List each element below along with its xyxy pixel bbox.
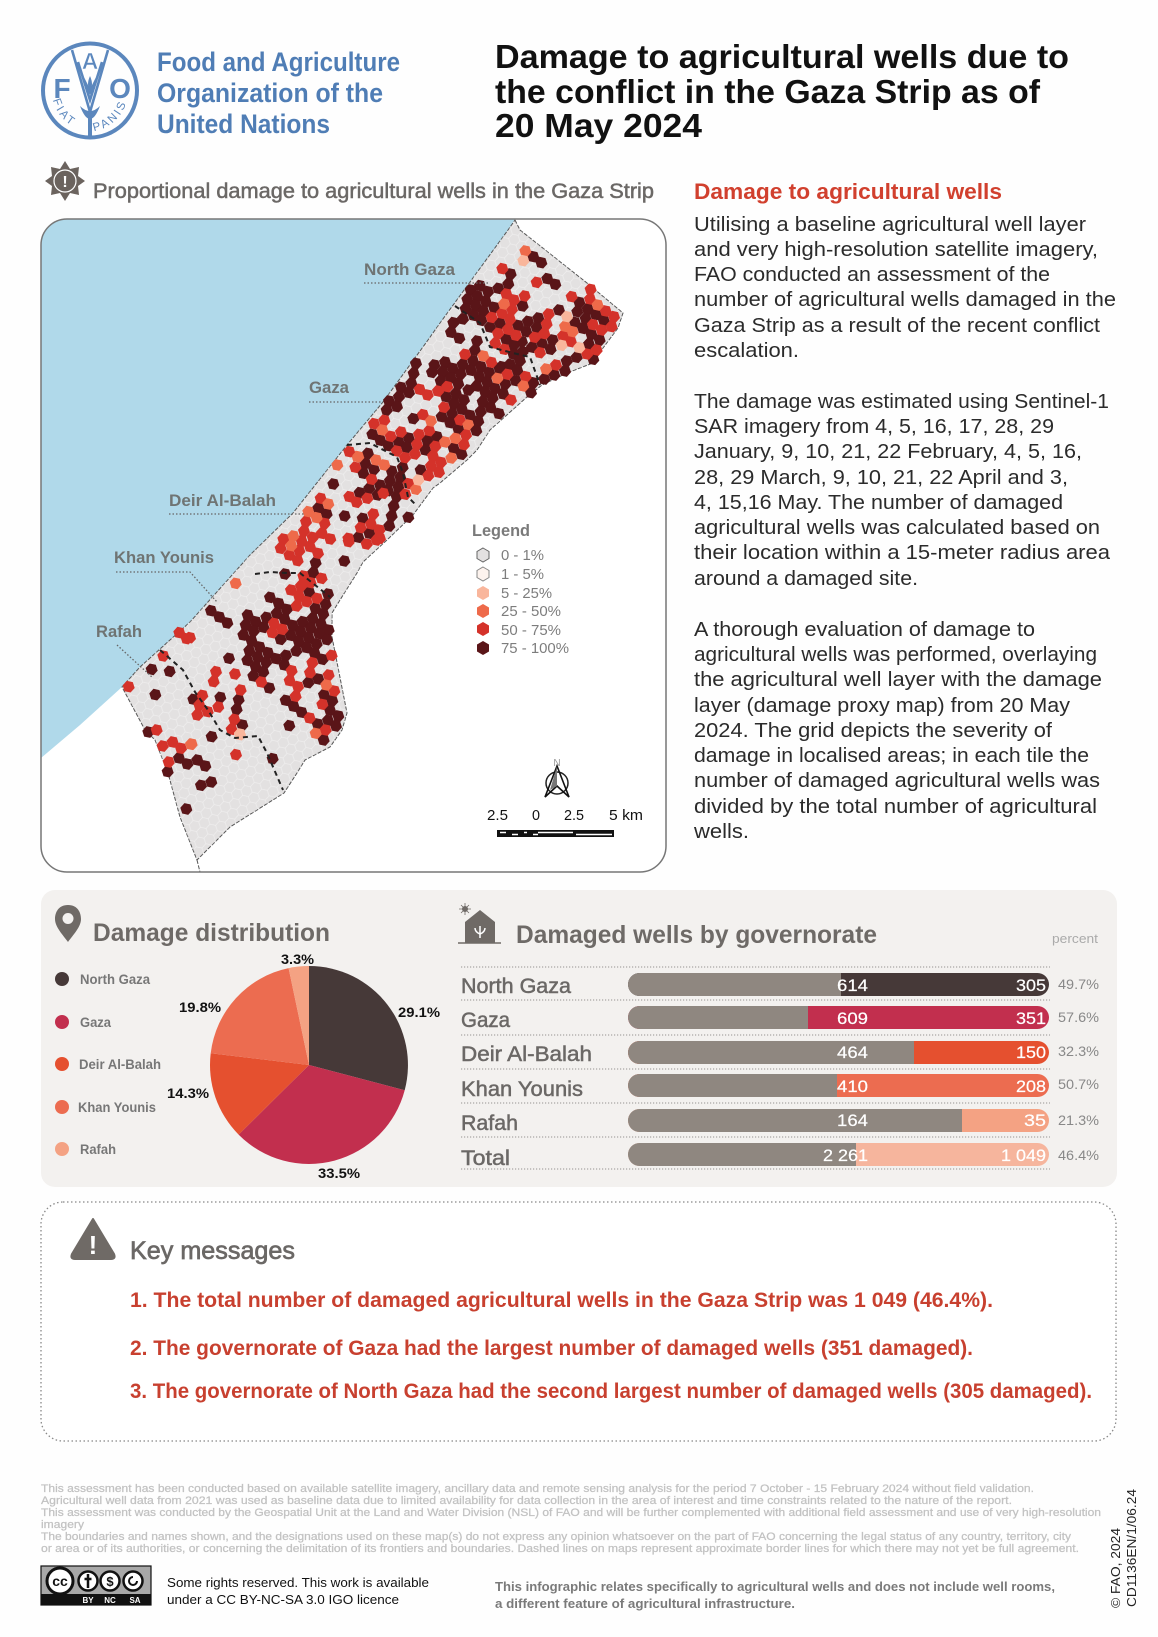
pie legend: Gaza <box>80 1015 111 1030</box>
scale bar: 2.5 <box>487 808 508 824</box>
title: Damage to agricultural wells due to <box>495 38 1069 75</box>
disclaimer text: imagery <box>41 1519 85 1531</box>
Gaza Strip land <box>122 220 623 860</box>
row: Total: Total <box>461 1147 510 1170</box>
label: Rafah <box>96 622 153 678</box>
disclaimer text: Agricultural well data from 2021 was used as baseline data due to limited availability for data collection in the area of interest and time constraints related to the nature of the report. <box>41 1495 1012 1507</box>
label: Rafah: Rafah <box>96 622 142 641</box>
text block: methodology: and very high-resolution satellite imagery, <box>694 238 1098 261</box>
text block: methodology: escalation. <box>694 339 799 362</box>
row: Deir Al-Balah: 464 <box>837 1043 868 1062</box>
pie legend: Rafah <box>80 1142 116 1157</box>
text block: methodology: A thorough evaluation of damage to <box>694 618 1035 641</box>
heading: Damaged wells by governorate <box>516 921 877 949</box>
map heading: Proportional damage to agricultural wells in the Gaza Strip <box>93 180 654 203</box>
text block: methodology: January, 9, 10, 21, 22 February, 4, 5, 16, <box>694 440 1082 463</box>
hex grid: Khan Younis <box>190 573 338 744</box>
pie chart <box>167 952 440 1181</box>
note on well rooms: a different feature of agricultural infrastructure. <box>495 1596 795 1611</box>
text block: methodology: divided by the total number of agricultural <box>694 795 1097 818</box>
organisation name: United Nations <box>157 109 330 139</box>
icon: greenhouse <box>458 903 501 943</box>
icon: north arrow <box>545 758 569 797</box>
icon: Creative Commons badge: NC <box>104 1596 116 1605</box>
scale bar: 5 km <box>609 808 643 824</box>
sea <box>41 219 515 758</box>
map legend: 1 - 5% <box>501 567 544 583</box>
row: Rafah: 21.3% <box>1058 1113 1099 1128</box>
text block: methodology: Gaza Strip as a result of the recent conflict <box>694 314 1100 337</box>
FAO logo: PANIS <box>92 102 125 131</box>
label: Gaza: Gaza <box>309 378 350 397</box>
icon: Creative Commons badge: $ <box>106 1574 114 1589</box>
pie legend <box>55 972 161 1157</box>
hex grid: central <box>345 363 476 538</box>
icon: damage star: ! <box>62 174 68 191</box>
icon: map pin <box>55 905 81 942</box>
scale bar: 2.5 <box>564 808 584 824</box>
row: Gaza: 351 <box>1016 1009 1046 1028</box>
pie chart: 3.3% <box>281 952 314 967</box>
label: North Gaza: North Gaza <box>364 260 456 279</box>
label: Gaza <box>309 378 383 402</box>
text block: methodology: FAO conducted an assessment of the <box>694 263 1050 286</box>
row: Rafah <box>461 1109 1099 1135</box>
row: Gaza: 57.6% <box>1058 1010 1099 1025</box>
map legend: 0 - 1% <box>501 548 544 564</box>
row: Khan Younis: 50.7% <box>1058 1077 1099 1092</box>
pie legend: Deir Al-Balah <box>79 1057 161 1072</box>
row: Rafah: Rafah <box>461 1112 518 1135</box>
map legend: 50 - 75% <box>501 623 561 639</box>
messages <box>130 1289 1092 1403</box>
messages: 3. The governorate of North Gaza had the second largest number of damaged wells (305 damaged). <box>130 1380 1092 1403</box>
label: North Gaza <box>364 260 490 283</box>
note on well rooms <box>495 1579 1055 1611</box>
text block: methodology: agricultural wells was performed, overlaying <box>694 643 1097 666</box>
icon: warning triangle <box>71 1219 115 1260</box>
row: Gaza: Gaza <box>461 1009 510 1032</box>
row: Gaza <box>461 1006 1099 1032</box>
row: Khan Younis: 410 <box>837 1077 868 1096</box>
row: North Gaza: 305 <box>1016 976 1046 995</box>
FAO logo: FIAT <box>53 98 76 124</box>
title: the conflict in the Gaza Strip as of <box>495 73 1041 110</box>
text block: methodology: SAR imagery from 4, 5, 16, 17, 28, 29 <box>694 415 1054 438</box>
row: Rafah: 164 <box>837 1111 868 1130</box>
unit: percent <box>1052 931 1098 946</box>
row: North Gaza: 614 <box>837 976 868 995</box>
organisation name: Food and Agriculture <box>157 47 400 77</box>
row: Khan Younis <box>461 1074 1099 1101</box>
text block: methodology: 28, 29 March, 9, 10, 21, 22 April and 3, <box>694 466 1068 489</box>
label: Deir Al-Balah: Deir Al-Balah <box>169 491 276 510</box>
scale bar <box>487 808 643 837</box>
label: Khan Younis: Khan Younis <box>114 548 214 567</box>
text block: methodology <box>693 213 1116 843</box>
text block: methodology: their location within a 15-meter radius area <box>694 541 1111 564</box>
vertical credits <box>1108 1489 1139 1608</box>
map legend <box>472 521 569 657</box>
pie chart: 19.8% <box>179 1000 221 1015</box>
organisation name: Organization of the <box>157 78 383 108</box>
icon: north arrow: N <box>553 758 561 769</box>
text block: methodology: The damage was estimated using Sentinel-1 <box>694 390 1109 413</box>
disclaimer text: or area or of its authorities, or concerning the delimitation of its frontiers and boundaries. Dashed lines on maps represent approximate border lines for which there may not yet be full agreement. <box>41 1543 1079 1555</box>
row: Deir Al-Balah: 150 <box>1016 1043 1046 1062</box>
row: Rafah: 35 <box>1024 1111 1046 1130</box>
row: Total: 46.4% <box>1058 1148 1099 1163</box>
panel: damage distribution <box>55 905 440 1181</box>
row: Deir Al-Balah: 32.3% <box>1058 1044 1099 1059</box>
icon: Creative Commons badge: cc <box>52 1573 68 1589</box>
text block: methodology: layer (damage proxy map) from 20 May <box>694 694 1071 717</box>
scale bar: 0 <box>532 808 540 824</box>
label: Khan Younis <box>114 548 217 602</box>
note on well rooms: This infographic relates specifically to agricultural wells and does not include well rooms, <box>495 1579 1055 1594</box>
icon: Creative Commons badge: BY <box>82 1596 94 1605</box>
heading: Damage distribution <box>93 919 330 947</box>
FAO logo <box>41 42 139 140</box>
row: Deir Al-Balah <box>461 1041 1099 1066</box>
map legend: 5 - 25% <box>501 586 552 602</box>
hex grid: Deir Al-Balah <box>281 452 377 563</box>
messages: 2. The governorate of Gaza had the largest number of damaged wells (351 damaged). <box>130 1337 973 1360</box>
row: Gaza: 609 <box>837 1009 868 1028</box>
panel: charts background <box>41 890 1117 1187</box>
pie legend: North Gaza <box>80 972 150 987</box>
row: North Gaza <box>461 973 1099 998</box>
text block: methodology: 2024. The grid depicts the severity of <box>694 719 1052 742</box>
icon: warning triangle: ! <box>89 1230 97 1260</box>
disclaimer text: This assessment has been conducted based on available satellite imagery, ancillary data and remote sensing analysis for the period 7 October - 15 February 2024 without field validation. <box>41 1483 1034 1495</box>
row: Total: 1 049 <box>1001 1146 1046 1165</box>
disclaimer text <box>41 1483 1101 1555</box>
pie chart: 14.3% <box>167 1086 209 1101</box>
vertical credits: © FAO, 2024 <box>1108 1528 1123 1608</box>
row: Khan Younis: 208 <box>1016 1077 1046 1096</box>
icon: damage star <box>45 161 85 201</box>
heading: Damage to agricultural wells: Damage to agricultural wells <box>694 179 1002 204</box>
panel: map <box>41 219 666 872</box>
disclaimer text: The boundaries and names shown, and the designations used on these map(s) do not express any opinion whatsoever on the part of FAO concerning the legal status of any country, territory, city <box>41 1531 1072 1543</box>
text block: methodology: number of agricultural wells damaged in the <box>694 288 1116 311</box>
panel: damaged wells by governorate <box>458 903 1099 1170</box>
licence text <box>167 1575 429 1607</box>
hex grid: north <box>441 251 614 429</box>
title <box>495 38 1069 144</box>
icon: Creative Commons badge: SA <box>129 1596 141 1605</box>
row: Deir Al-Balah: Deir Al-Balah <box>461 1043 592 1066</box>
pie chart: 29.1% <box>398 1005 440 1020</box>
heading: Key messages <box>130 1237 295 1265</box>
licence text: Some rights reserved. This work is available <box>167 1575 429 1590</box>
vertical credits: CD1136EN/1/06.24 <box>1124 1489 1139 1607</box>
row: Total: 2 261 <box>823 1146 868 1165</box>
text block: methodology: around a damaged site. <box>694 567 918 590</box>
pie legend: Khan Younis <box>78 1100 156 1115</box>
FAO logo: F <box>53 73 71 104</box>
FAO logo: O <box>109 73 131 104</box>
icon: Creative Commons badge <box>41 1566 151 1605</box>
text block: methodology: 4, 15,16 May. The number of damaged <box>694 491 1063 514</box>
text block: methodology: Utilising a baseline agricultural well layer <box>694 213 1086 236</box>
map legend: Legend <box>472 521 530 540</box>
text block: methodology: the agricultural well layer with the damage <box>694 668 1102 691</box>
panel: key messages <box>41 1202 1116 1441</box>
text block: methodology: agricultural wells was calculated based on <box>694 516 1100 539</box>
messages: 1. The total number of damaged agricultural wells in the Gaza Strip was 1 049 (46.4%). <box>130 1289 993 1312</box>
governorate boundaries <box>160 306 540 790</box>
text block: methodology: wells. <box>693 820 749 843</box>
licence text: under a CC BY-NC-SA 3.0 IGO licence <box>167 1592 399 1607</box>
row: North Gaza: 49.7% <box>1058 977 1099 992</box>
map legend: 25 - 50% <box>501 604 561 620</box>
hex grid: Rafah <box>129 633 273 809</box>
title: 20 May 2024 <box>495 107 703 144</box>
text block: methodology: number of damaged agricultural wells was <box>694 769 1100 792</box>
row: Total <box>461 1143 1099 1170</box>
text block: methodology: damage in localised areas; in each tile the <box>694 744 1089 767</box>
organisation name <box>157 47 400 139</box>
map legend: 75 - 100% <box>501 641 569 657</box>
FAO logo: A <box>82 48 98 74</box>
disclaimer text: This assessment was conducted by the Geospatial Unit at the Land and Water Division (NSL) of FAO and will be further complemented with additional field assessment and use of very high-resolution <box>41 1507 1101 1519</box>
row: Khan Younis: Khan Younis <box>461 1078 583 1101</box>
label: Deir Al-Balah <box>169 491 305 514</box>
row: North Gaza: North Gaza <box>461 975 571 998</box>
pie chart: 33.5% <box>318 1166 360 1181</box>
